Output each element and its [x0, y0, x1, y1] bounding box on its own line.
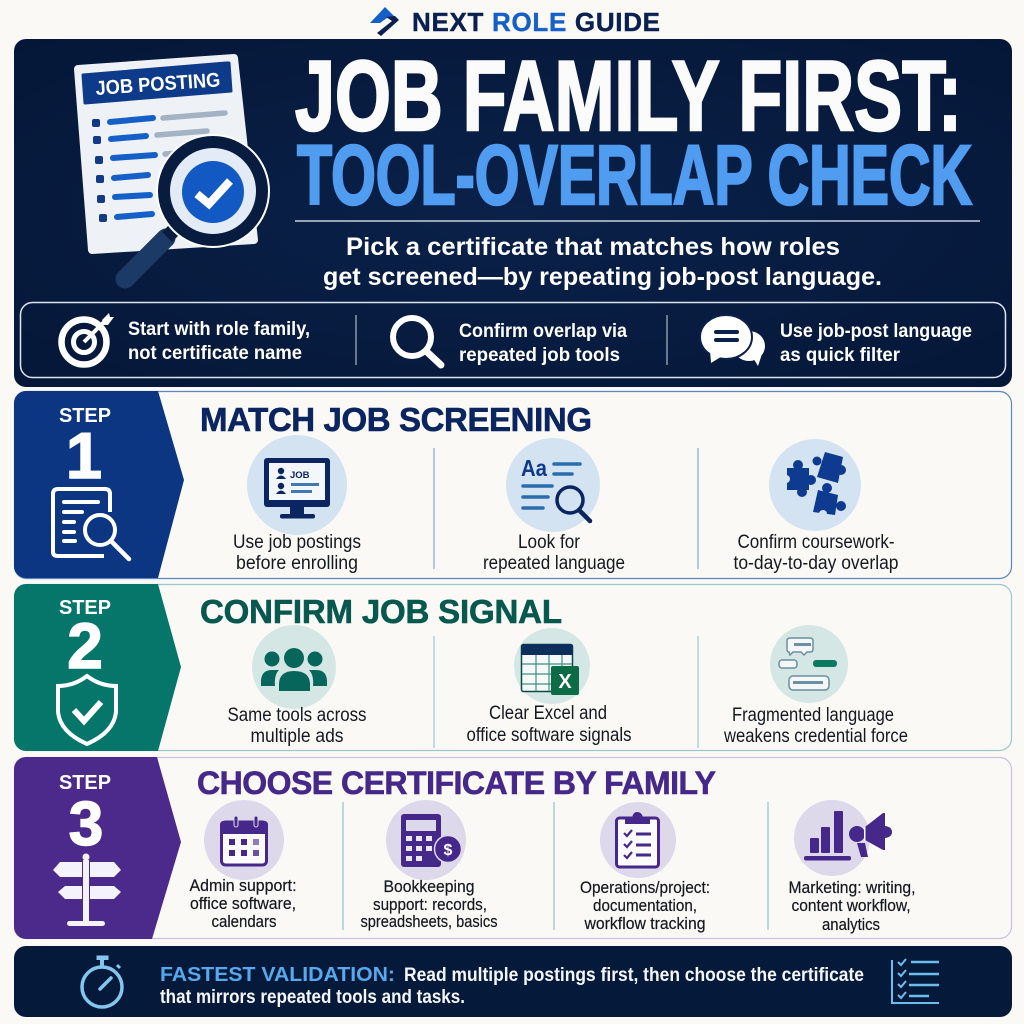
- item: bookkeeping support: [360, 800, 498, 931]
- header logo and brand: [370, 7, 660, 37]
- item: marketing: [788, 800, 916, 934]
- item: operations and project: Operations/project:: [580, 879, 710, 897]
- strip: three quick tips: [20, 302, 1006, 378]
- step 2 badge: 2: [67, 610, 103, 682]
- item: bookkeeping support: $: [444, 842, 453, 859]
- item: operations and project: documentation,: [593, 897, 697, 915]
- item: admin support: office software,: [190, 895, 296, 913]
- subtitle: Pick a certificate that matches how roles: [346, 233, 840, 261]
- item: same tools: multiple ads: [250, 726, 344, 747]
- step 2 badge: [14, 584, 181, 751]
- panel: step 3: [14, 757, 1012, 939]
- tip: overlap: repeated job tools: [459, 345, 620, 366]
- icon: signpost: [53, 854, 121, 926]
- item: Excel signals: X: [558, 671, 572, 693]
- tip: role family: [128, 319, 310, 364]
- step 1 badge: [14, 391, 184, 578]
- illustration: job posting under magnifier: [78, 58, 270, 279]
- step 3 heading: CHOOSE CERTIFICATE BY FAMILY: [197, 765, 716, 801]
- panel: step 1: [14, 391, 1012, 578]
- icon: chat bubbles: [700, 315, 765, 366]
- icon: logo arrow: [370, 7, 399, 36]
- item: Excel signals: office software signals: [466, 725, 632, 746]
- icon: stopwatch: [82, 956, 122, 1007]
- callout text: FASTEST VALIDATION:: [160, 964, 395, 986]
- subtitle: [323, 233, 882, 291]
- item: job postings: Use job postings: [233, 532, 361, 553]
- tip: job-post language: Use job-post language: [780, 321, 972, 342]
- item: operations and project: [580, 802, 710, 933]
- item: Excel signals: Clear Excel and: [489, 703, 607, 724]
- item: admin support: Admin support:: [190, 877, 296, 895]
- icon: shield check: [58, 676, 116, 744]
- item: same tools: Same tools across: [228, 705, 366, 726]
- item: repeated language: [483, 438, 625, 574]
- item: coursework overlap: Confirm coursework-: [738, 532, 894, 553]
- item: fragmented language: [723, 625, 908, 747]
- item: bookkeeping support: Bookkeeping: [384, 878, 474, 896]
- item: fragmented language: Fragmented language: [732, 705, 894, 726]
- icon: magnifier: [393, 318, 441, 365]
- tip: job-post language: [780, 321, 972, 366]
- step 3 badge: 3: [69, 790, 103, 859]
- item: repeated language: repeated language: [483, 553, 625, 574]
- item: Excel signals: [466, 628, 632, 746]
- item: marketing: content workflow,: [792, 897, 910, 915]
- icon: document search: [53, 489, 129, 559]
- icon: target: [62, 313, 114, 364]
- item: marketing: Marketing: writing,: [788, 879, 916, 897]
- item: admin support: [190, 800, 296, 931]
- tip: overlap: [459, 321, 627, 366]
- tip: role family: Start with role family,: [128, 319, 310, 340]
- item: admin support: calendars: [212, 913, 276, 931]
- callout text: Read multiple postings first, then choose the certificate: [404, 965, 864, 986]
- step 1 badge: 1: [66, 419, 102, 492]
- item: same tools: [228, 625, 366, 747]
- step 1 heading: MATCH JOB SCREENING: [200, 401, 592, 438]
- panel: step 2: [14, 584, 1012, 751]
- brand name: NEXT ROLE GUIDE: [412, 7, 660, 37]
- callout text: that mirrors repeated tools and tasks.: [160, 987, 465, 1008]
- subtitle: get screened—by repeating job-post language.: [323, 263, 882, 291]
- item: job postings: JOB: [290, 470, 310, 481]
- item: repeated language: Aa: [521, 455, 547, 481]
- panel: hero: [14, 39, 1012, 387]
- item: bookkeeping support: spreadsheets, basics: [360, 913, 498, 931]
- step 2 heading: CONFIRM JOB SIGNAL: [200, 593, 562, 630]
- item: job postings: before enrolling: [236, 553, 358, 574]
- callout text: [160, 964, 864, 1008]
- illustration: job posting under magnifier: JOB POSTING: [95, 69, 221, 100]
- tip: role family: not certificate name: [128, 343, 302, 364]
- item: bookkeeping support: support: records,: [373, 896, 487, 914]
- tip: overlap: Confirm overlap via: [459, 321, 627, 342]
- step 1 badge: STEP: [59, 405, 111, 427]
- step 3 badge: STEP: [59, 772, 111, 794]
- item: fragmented language: weakens credential force: [723, 726, 908, 747]
- item: coursework overlap: to-day-to-day overlap: [734, 553, 898, 574]
- icon: checklist: [892, 959, 939, 1003]
- tip: job-post language: as quick filter: [780, 345, 901, 366]
- step 3 badge: [14, 757, 181, 939]
- item: operations and project: workflow tracking: [584, 915, 706, 933]
- item: job postings: [233, 435, 361, 574]
- footer callout: [14, 946, 1012, 1017]
- title: [295, 40, 972, 222]
- item: repeated language: Look for: [518, 532, 581, 553]
- item: marketing: analytics: [822, 916, 880, 934]
- item: coursework overlap: [734, 439, 898, 574]
- step 2 badge: STEP: [59, 597, 111, 619]
